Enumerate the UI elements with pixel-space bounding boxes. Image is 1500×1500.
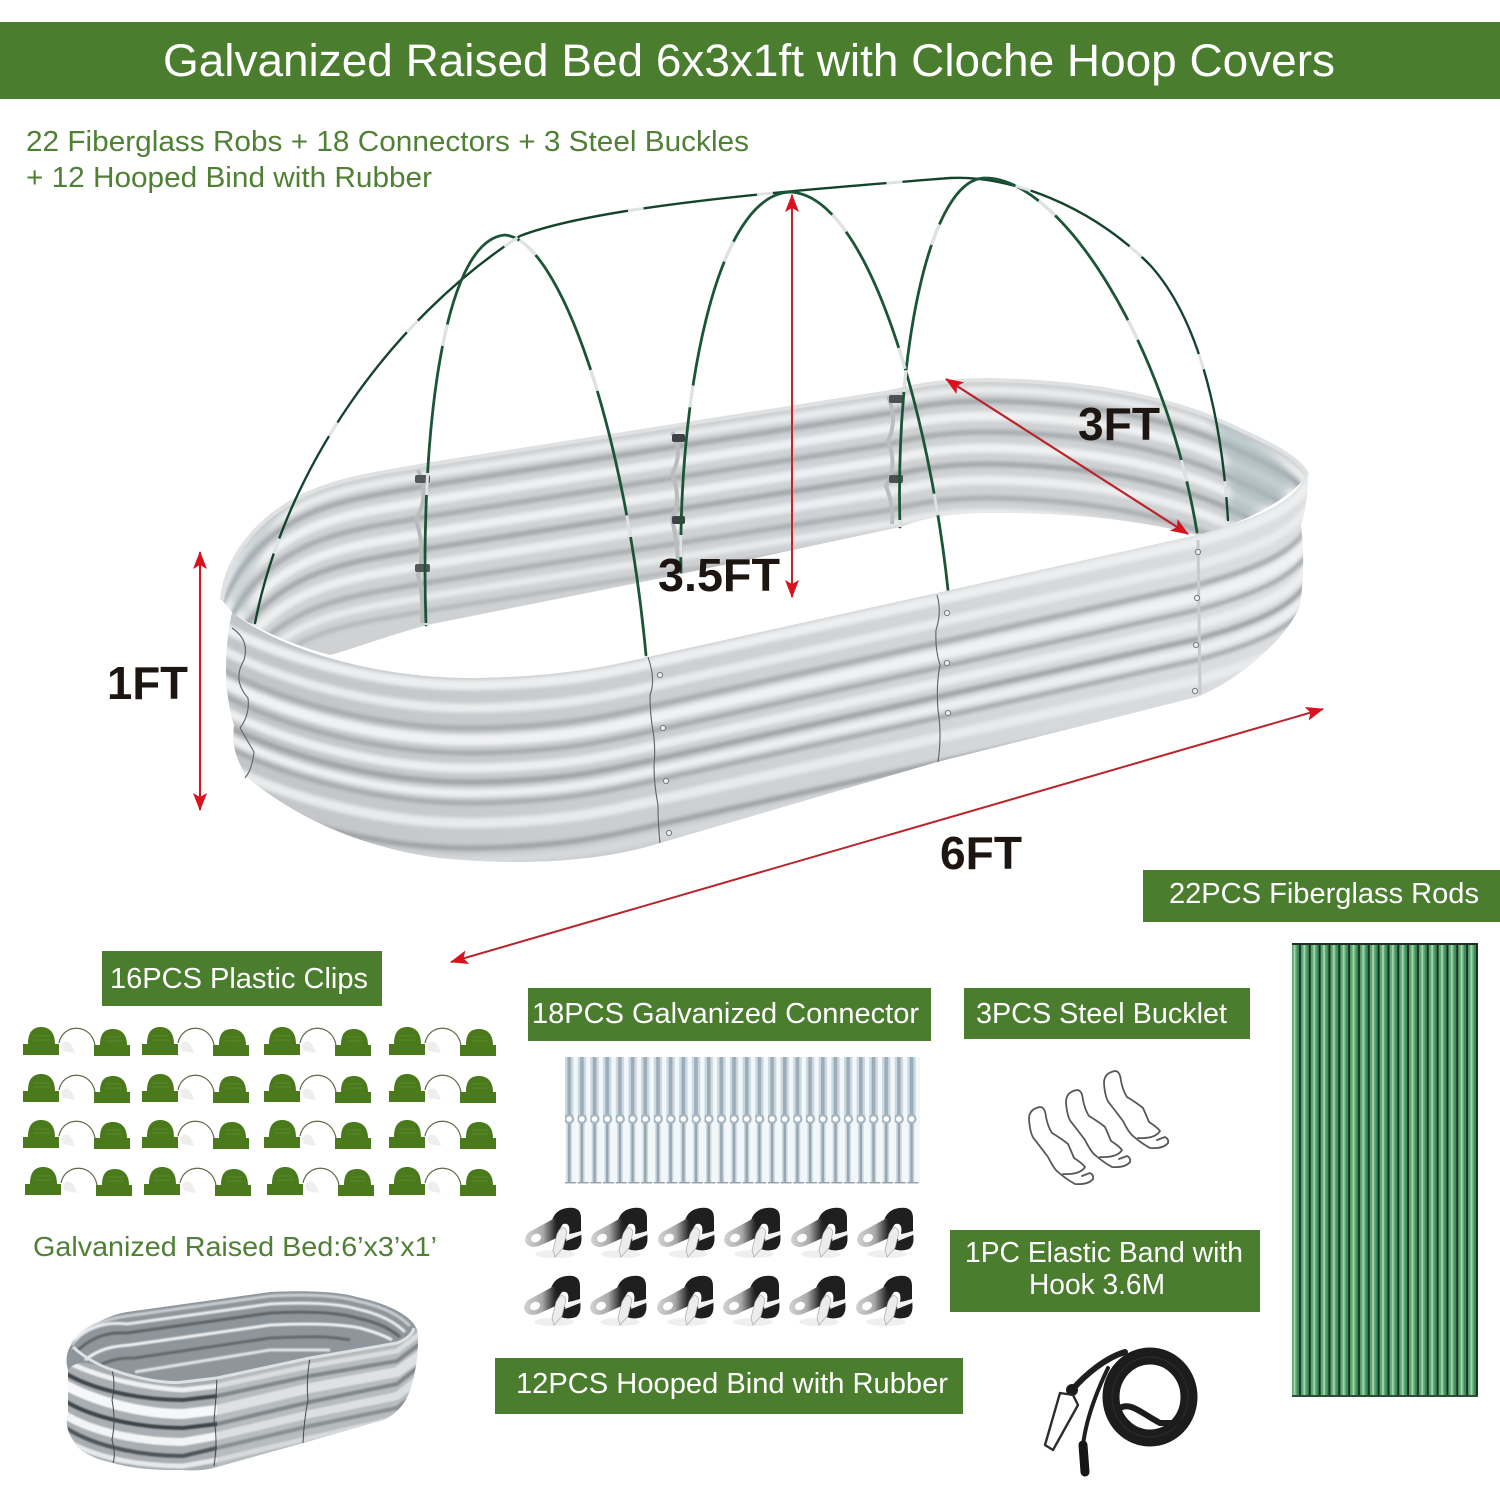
hooped binds with rubber [524,1208,914,1326]
bed interior back wall [222,382,1306,655]
3FT dimension: 3FT [1078,398,1160,450]
title banner: Galvanized Raised Bed 6x3x1ft with Cloche Hoop Covers [163,35,1335,86]
label: fiberglass rods: 22PCS Fiberglass Rods [1169,878,1479,910]
galvanized connectors row [565,1057,920,1184]
label: elastic band: 1PC Elastic Band with [965,1237,1243,1269]
label: plastic clips [102,951,382,1006]
elastic band with hook [1045,1352,1189,1472]
label: galvanized connector: 18PCS Galvanized Connector [532,998,919,1030]
3.5FT dimension: 3.5FT [658,549,780,601]
label: hooped bind with rubber [495,1358,963,1414]
plastic clips grid [23,1027,496,1196]
label: hooped bind with rubber: 12PCS Hooped Bind with Rubber [516,1368,948,1400]
label: elastic band: Hook 3.6M [1029,1269,1165,1301]
green fiberglass hoops [255,178,1228,655]
kit contents text: 22 Fiberglass Robs + 18 Connectors + 3 Steel Buckles [26,126,749,158]
main raised bed illustration with hoops [200,178,1315,870]
bed seams and rivets [232,540,1201,843]
bed top rim [222,380,1307,600]
caption: galvanized raised bed size: Galvanized Raised Bed:6’x3’x1’ [33,1231,437,1262]
6FT dimension [451,709,1323,962]
rear seam clamps [415,395,903,623]
bed front wall [200,460,1315,870]
6FT dimension: 6FT [940,827,1022,879]
kit contents text: + 12 Hooped Bind with Rubber [26,162,432,194]
label: elastic band [950,1230,1260,1312]
3FT dimension [946,379,1188,534]
steel buckles [1029,1071,1168,1184]
label: plastic clips: 16PCS Plastic Clips [110,963,368,995]
label: steel bucklet: 3PCS Steel Bucklet [976,998,1227,1030]
kit contents text [26,126,749,194]
title banner [0,22,1500,99]
label: steel bucklet [964,988,1250,1039]
small galvanized raised bed [60,1291,427,1480]
label: galvanized connector [528,988,931,1041]
fiberglass rods bundle [1292,943,1478,1397]
label: fiberglass rods [1143,870,1500,922]
1FT dimension: 1FT [107,657,188,709]
